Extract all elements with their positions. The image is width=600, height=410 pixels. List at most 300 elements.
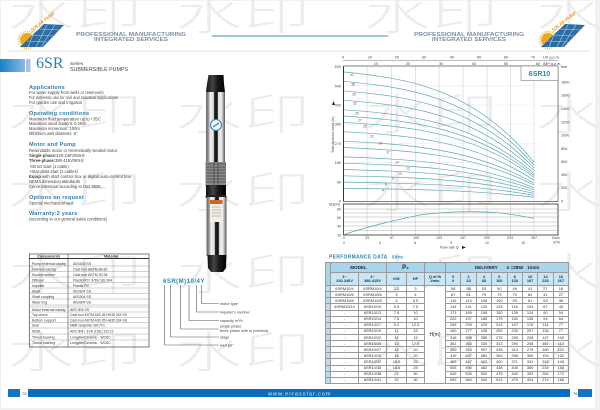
- performance table: 245: [450, 322, 456, 327]
- efficiency chart: 0: [343, 241, 345, 245]
- performance table: 66: [482, 278, 486, 283]
- efficiency chart: Flow rate Q: [440, 246, 459, 250]
- performance table: -: [344, 377, 345, 382]
- performance table: 122: [558, 347, 564, 352]
- performance table: 41: [528, 286, 532, 291]
- performance table: 1~: [342, 274, 347, 279]
- performance table: 540: [481, 377, 487, 382]
- materials table: Pump external casing: [32, 262, 66, 266]
- top flow scales: IMP g.p.m.: [543, 62, 561, 66]
- performance table: DELIVERY n =2850 1/min: [475, 265, 539, 270]
- performance table: 81: [466, 292, 471, 297]
- top flow scales: 40: [472, 62, 476, 66]
- performance table: 93: [513, 298, 517, 303]
- performance table: 233: [542, 278, 549, 283]
- performance table: 15: [413, 334, 418, 340]
- performance table: 100: [496, 278, 503, 283]
- performance table: 80: [543, 310, 548, 315]
- materials table: Diffuser: [32, 278, 45, 282]
- performance table: 383: [481, 353, 487, 358]
- performance table: 584: [465, 377, 472, 382]
- materials table: AISI304 SS: [73, 290, 92, 294]
- performance table: 462: [450, 359, 456, 364]
- performance table: 438: [496, 365, 503, 370]
- logo: solar pump right: [540, 10, 585, 48]
- performance table: 6SR10/29: [364, 353, 381, 358]
- performance table: 361: [450, 341, 456, 346]
- left axis labels: 180: [335, 161, 341, 165]
- series heading: [0, 55, 129, 73]
- materials table: Motor external casing: [32, 308, 66, 312]
- performance table: 255: [511, 334, 518, 340]
- efficiency chart: Eta(%): [329, 202, 340, 206]
- performance table: 54: [559, 310, 563, 315]
- text block: specifications: Special mechanical seal: [29, 200, 74, 206]
- performance table: KW: [393, 276, 400, 281]
- performance table: l/min: [430, 278, 440, 283]
- performance table: 535: [465, 371, 472, 376]
- performance table: 313: [496, 341, 503, 346]
- performance table: 158: [558, 365, 564, 370]
- performance chart: [329, 56, 569, 250]
- performance table: 245: [481, 328, 487, 333]
- materials table: Components: [37, 254, 60, 258]
- performance table: 290: [511, 341, 518, 346]
- performance table: 53: [482, 286, 486, 291]
- top flow scales: 40: [450, 56, 454, 60]
- performance table: 234: [542, 365, 549, 370]
- footer band: 75: [22, 391, 27, 396]
- tagline left: [76, 32, 186, 43]
- performance table: 213: [496, 322, 503, 327]
- grid: [367, 66, 534, 201]
- performance table: 447: [465, 359, 472, 364]
- performance table: 6SR10/27: [364, 347, 381, 352]
- performance table: [325, 262, 569, 384]
- efficiency chart: m³/h: [553, 240, 560, 244]
- performance table: 462: [481, 365, 487, 370]
- performance table: 100: [558, 334, 564, 340]
- model code diagram: capacity m³/h: [220, 319, 243, 323]
- efficiency chart: 20: [337, 234, 341, 238]
- performance table: 144: [450, 304, 456, 309]
- efficiency chart: 33: [365, 236, 369, 240]
- performance table: 11: [394, 328, 399, 333]
- materials table: Cast-iron ASTM 30 35: [73, 268, 107, 272]
- materials table: AISI304 SS: [73, 300, 92, 304]
- performance table: 405: [511, 365, 518, 370]
- performance table: 167: [527, 278, 533, 283]
- performance table: 393: [527, 371, 533, 376]
- performance table: 106: [481, 298, 487, 303]
- left axis labels: 540: [335, 84, 341, 88]
- performance table: -: [344, 365, 345, 370]
- performance table: 318: [450, 334, 456, 340]
- materials table: AISI 304 / 314/ 316L/ 2Cr13: [70, 330, 113, 334]
- left axis labels: 630: [335, 65, 341, 69]
- performance table: 357: [481, 347, 487, 352]
- performance table: 186: [558, 377, 564, 382]
- performance table: 176: [527, 322, 533, 327]
- performance table: -: [344, 310, 345, 315]
- performance table: 159: [481, 310, 487, 315]
- performance table: 0: [452, 278, 454, 283]
- performance table: 274: [542, 377, 549, 382]
- efficiency chart: 200: [484, 236, 490, 240]
- performance table: 225: [481, 322, 487, 327]
- tagline right: INTEGRATED SERVICES: [432, 37, 506, 43]
- performance table: 336: [511, 353, 518, 358]
- performance table: 15: [413, 328, 418, 333]
- performance table: 592: [450, 377, 456, 382]
- performance table: HP: [413, 276, 418, 281]
- stage labels: 8: [392, 176, 394, 180]
- performance table: 6SR10/41: [364, 377, 381, 382]
- performance table: 300: [527, 353, 533, 358]
- performance table: 197: [465, 316, 472, 321]
- efficiency chart: 267: [531, 236, 537, 240]
- stage labels: 10: [398, 172, 402, 176]
- performance table: 50: [497, 286, 501, 291]
- performance table: 2.2: [394, 286, 399, 291]
- performance table: 371: [511, 359, 518, 364]
- performance table: 239: [465, 322, 472, 327]
- performance table: MODEL: [350, 265, 367, 270]
- performance table: 254: [542, 371, 549, 376]
- performance table: 6SRM10/8: [335, 298, 354, 303]
- performance table: 58: [451, 286, 455, 291]
- materials table: Shaft: [32, 290, 40, 294]
- left axis labels: 450: [335, 104, 341, 108]
- performance table: 2: [467, 274, 470, 279]
- performance table: 277: [465, 328, 472, 333]
- performance table: 16: [559, 274, 563, 279]
- materials table: Suction screen: [32, 273, 55, 277]
- model code diagram: three phase with m (method): [220, 329, 269, 333]
- heading: applications: Applications: [29, 85, 65, 91]
- text block: specifications: Curve tolerance according to ISO 9906: [29, 184, 101, 189]
- performance table: 185: [481, 316, 487, 321]
- performance table: 15: [394, 353, 399, 358]
- model code diagram: motor type: [220, 302, 238, 306]
- performance table title: PERFORMANCE DATA 50Hz: [329, 254, 404, 260]
- right axis labels: 1400: [561, 107, 569, 111]
- performance table: 440: [511, 371, 518, 376]
- materials table: Material: [104, 254, 118, 258]
- performance table: 132: [481, 304, 487, 309]
- logo: solar pump left: [18, 10, 64, 48]
- performance table: 10: [413, 316, 418, 321]
- stage labels: [350, 73, 410, 192]
- performance table: 6SR10/10: [364, 304, 381, 309]
- performance table: 275: [496, 334, 503, 340]
- footer band: www.errasolar.com: [267, 392, 331, 398]
- performance table: -: [344, 322, 345, 327]
- model badge: 6SR10: [529, 71, 550, 78]
- performance table: 180: [542, 347, 549, 352]
- text block: specifications: NEMA dimension standards: [29, 179, 80, 184]
- right axis labels: 800: [561, 147, 567, 151]
- performance table: 134: [542, 328, 549, 333]
- performance table: 20: [413, 353, 418, 358]
- performance table: 419: [450, 353, 456, 358]
- efficiency chart: 80: [337, 208, 341, 212]
- performance table: 422: [481, 359, 487, 364]
- performance table: 132: [558, 353, 564, 358]
- right axis labels: [561, 65, 569, 204]
- performance table: 41: [543, 292, 548, 297]
- text block: specifications: +Direct start (1 cable): [29, 164, 69, 169]
- performance table: 14: [543, 274, 548, 279]
- efficiency chart: 60: [337, 216, 341, 220]
- performance table: 70: [513, 292, 517, 297]
- performance table: 77: [559, 328, 563, 333]
- performance table: 6SRM10/8: [363, 298, 382, 303]
- performance table: 62: [528, 292, 532, 297]
- performance table: 7.5: [394, 310, 399, 315]
- performance table: P₂: [402, 265, 409, 271]
- performance table: 167: [542, 341, 549, 346]
- tagline left: INTEGRATED SERVICES: [94, 37, 168, 43]
- performance table: 150: [496, 310, 503, 315]
- model code diagram: well φ6": [220, 344, 234, 348]
- performance table: 6SR10/25: [364, 341, 381, 346]
- performance table: 207: [527, 328, 533, 333]
- performance table: -: [344, 359, 345, 364]
- efficiency chart: 233: [507, 236, 513, 240]
- text block: specifications: For garden use and irrigation: [29, 100, 83, 105]
- performance table: 475: [496, 371, 503, 376]
- heading: motor and pump: Motor and Pump: [29, 142, 76, 148]
- performance table: 260: [450, 328, 456, 333]
- stage labels: 12: [406, 166, 410, 170]
- performance table: 400: [496, 359, 503, 364]
- performance table: 4: [414, 292, 417, 297]
- performance table: 194: [542, 353, 549, 358]
- text block: specifications: (according to our general sales conditions): [29, 216, 108, 222]
- performance table: 36: [559, 298, 563, 303]
- footer band: [8, 389, 592, 398]
- head curves: [343, 72, 534, 197]
- top flow scales: 30: [422, 56, 426, 60]
- performance table: 252: [496, 328, 503, 333]
- performance table: -: [344, 347, 345, 352]
- stage labels: 27: [358, 118, 362, 122]
- performance table: -: [344, 316, 345, 321]
- performance table: 202: [450, 316, 456, 321]
- materials table: Plastic/PC/ 3-5S/ SS 304: [73, 278, 112, 282]
- performance table: 18: [559, 286, 563, 291]
- performance table: 5.5: [394, 304, 399, 309]
- performance table: 22: [394, 371, 399, 376]
- performance table: 77: [559, 322, 563, 327]
- performance table: 7.5: [394, 316, 399, 321]
- performance table: 169: [465, 310, 472, 315]
- performance table: 25: [413, 365, 418, 370]
- model badge: [521, 66, 558, 80]
- series heading: 6SR: [36, 55, 64, 72]
- performance table: 5.5: [413, 298, 418, 303]
- performance table: 22: [394, 377, 399, 382]
- model code diagram: [163, 279, 269, 348]
- stage labels: 17: [386, 150, 390, 154]
- performance table: -: [344, 341, 345, 346]
- performance table: 338: [496, 347, 503, 352]
- pump label plate: [210, 200, 222, 222]
- tagline right: [414, 32, 524, 43]
- performance table: 267: [558, 278, 564, 283]
- performance table: 15: [394, 347, 399, 352]
- icon: pump badge: [210, 120, 222, 130]
- performance table: 279: [527, 347, 533, 352]
- top flow scales: 20: [395, 56, 399, 60]
- efficiency chart: 12: [485, 241, 489, 245]
- materials table: [29, 254, 149, 347]
- efficiency chart: 6: [414, 241, 416, 245]
- left axis labels: 90: [337, 180, 341, 184]
- materials table: AISI 304 SS: [70, 308, 90, 312]
- performance table: 6SR10/12: [364, 310, 381, 315]
- performance table: 45: [559, 304, 563, 309]
- plot frame: [344, 66, 558, 202]
- efficiency chart: 100: [413, 236, 419, 240]
- performance table: Q m³/h: [429, 274, 441, 279]
- performance table: 46: [513, 286, 517, 291]
- materials table: Longyite/Ceramic - WC6C: [70, 341, 111, 345]
- left axis labels: Total dynamic head (m): [331, 117, 335, 153]
- performance table: 175: [496, 316, 503, 321]
- performance table: -: [344, 334, 345, 340]
- top flow scales: 60: [504, 56, 508, 60]
- performance table: 502: [481, 371, 487, 376]
- materials table: Top chuck: [32, 313, 48, 317]
- top flow scales: 50: [504, 62, 508, 66]
- performance table: 145: [527, 316, 533, 321]
- performance table: 18.5: [393, 365, 400, 370]
- text block: specifications: Maximum fluid temperature up to +35C: [29, 116, 101, 122]
- performance table: 3~: [370, 274, 375, 279]
- performance table: 125: [496, 304, 503, 309]
- top flow scales: 50: [477, 56, 481, 60]
- performance table: 110: [450, 298, 456, 303]
- performance table: 6SR10/32: [364, 359, 381, 364]
- top flow scales: 70: [531, 56, 535, 60]
- performance table: 407: [465, 353, 472, 358]
- performance table: 258: [527, 341, 533, 346]
- performance table: 228: [527, 334, 533, 340]
- performance table: 4: [395, 298, 398, 303]
- performance table: 145: [558, 359, 564, 364]
- performance table: 513: [496, 377, 503, 382]
- efficiency chart: 40: [337, 224, 341, 228]
- performance table: 353: [465, 341, 472, 346]
- performance table: 30: [413, 371, 418, 376]
- model code diagram: 6SR(M)10/4Y: [163, 279, 205, 285]
- performance table: 20: [413, 347, 418, 352]
- performance table: 220-240V: [336, 278, 353, 283]
- performance table: 285: [481, 334, 487, 340]
- performance table: 27: [543, 286, 548, 291]
- text block: specifications: For water supply from wells or reservoirs: [29, 90, 104, 95]
- performance table: 25: [413, 359, 418, 364]
- text block: specifications: Minimum well diameter: 6": [29, 131, 78, 136]
- performance table: 3: [395, 292, 398, 297]
- materials table: Seal: [32, 324, 39, 328]
- performance table: 141: [465, 304, 472, 309]
- performance table: 53: [543, 298, 548, 303]
- performance table: 6SR10/19: [364, 328, 381, 333]
- top flow scales: 10: [368, 56, 372, 60]
- efficiency chart: [329, 202, 560, 250]
- performance table: 10: [528, 274, 532, 279]
- efficiency chart: 167: [460, 236, 466, 240]
- performance table: 79: [482, 292, 486, 297]
- stage labels: 22: [370, 134, 374, 138]
- performance table: 11: [394, 334, 399, 340]
- text block: specifications: Three-phase:380-415V/50Hz: [29, 158, 84, 163]
- tagline left: PROFESSIONAL MANUFACTURING: [76, 32, 186, 38]
- performance table: 87: [451, 292, 455, 297]
- performance table: 116: [512, 304, 518, 309]
- performance table: 6SR10/14: [364, 316, 381, 321]
- performance table: 139: [511, 310, 518, 315]
- materials table: Cast-iron ASTM A30 35 HH35 304 SS: [70, 318, 128, 322]
- stage labels: 25: [363, 124, 367, 128]
- efficiency chart: 0: [343, 236, 345, 240]
- right axis labels: 1800: [561, 80, 569, 84]
- performance table: 13: [394, 341, 399, 346]
- left axis labels: 270: [335, 142, 341, 146]
- materials table: Plastic PC: [73, 284, 90, 288]
- performance table: 6SRM10/4: [335, 286, 354, 291]
- pump illustration: [206, 75, 227, 272]
- performance table: 360: [527, 365, 533, 370]
- materials table: Wear ring: [32, 300, 47, 304]
- right axis labels: 1600: [561, 94, 569, 98]
- efficiency chart: 15: [521, 241, 525, 245]
- performance table: 18.5: [393, 359, 400, 364]
- model code diagram: impeller's number: [220, 310, 251, 314]
- performance table: 7.5: [413, 304, 418, 309]
- performance table: 6SRM10/6: [335, 292, 354, 297]
- materials table: AISI304 SS: [73, 262, 92, 266]
- materials table: Shaft: [32, 330, 40, 334]
- tagline right: PROFESSIONAL MANUFACTURING: [414, 32, 524, 38]
- heading: warranty: Warranty:2 years: [29, 211, 77, 217]
- performance table: 12.5: [412, 322, 419, 327]
- performance table: 363: [496, 353, 503, 358]
- performance table: 17.5: [412, 341, 419, 346]
- top flow scales: US g.p.m.: [543, 56, 560, 60]
- right axis labels: 400: [561, 173, 567, 177]
- materials table: Thrust bushing: [32, 341, 55, 345]
- top flow scales: [342, 56, 561, 66]
- efficiency chart: 67: [390, 236, 394, 240]
- performance table: -: [344, 353, 345, 358]
- stage labels: 4: [382, 188, 384, 192]
- text block: specifications: Equip with start control box or digital auto-control box: [29, 174, 132, 179]
- performance table: 6SRM10/6: [363, 292, 382, 297]
- performance table: 331: [527, 359, 533, 364]
- performance table: 475: [511, 377, 518, 382]
- performance table: 75: [497, 292, 501, 297]
- top flow scales: 60: [536, 62, 540, 66]
- text block: specifications: Maximum sand content: 0.25%: [29, 121, 86, 126]
- performance table: 330: [481, 341, 487, 346]
- materials table: Longyite/Ceramic - WC6C: [70, 336, 111, 340]
- performance table: 113: [558, 341, 564, 346]
- performance table: 6SRM10/4: [363, 286, 382, 291]
